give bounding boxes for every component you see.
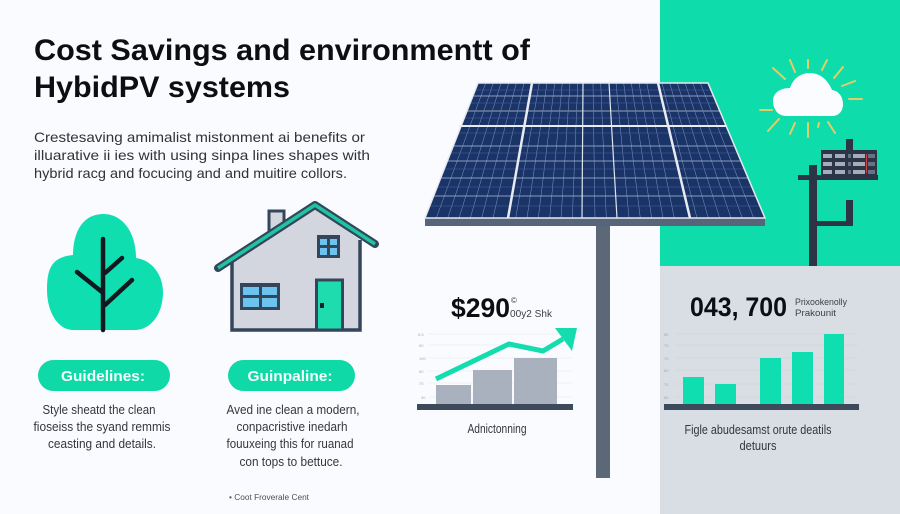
- pole: [596, 226, 610, 478]
- intro text block: illuarative ii ies with using sinpa lines shapes with: [34, 147, 370, 163]
- stat: $290: 00y2 Shk: [510, 309, 553, 320]
- title: [34, 34, 530, 104]
- chart: environmental bars: 70: [664, 382, 669, 387]
- intro text block: Crestesaving amimalist mistonment ai benefits or: [34, 129, 365, 145]
- stat: $290: ©: [511, 296, 517, 305]
- chart: cost savings bars and arrow: 60: [419, 369, 424, 374]
- caption: left column: Style sheatd the clean: [42, 402, 156, 417]
- chart: cost savings bars and arrow: 70: [419, 381, 424, 386]
- intro text block: hybrid racg and focucing and and muitire collors.: [34, 165, 347, 181]
- chart: environmental bars: 60: [664, 368, 669, 373]
- chart: cost savings bars and arrow: 50: [419, 343, 424, 348]
- stat: 043, 700: [690, 292, 847, 322]
- stat: 043, 700: Prakounit: [795, 308, 837, 318]
- icon: cloud: [773, 73, 843, 116]
- icon: large window: [240, 283, 280, 310]
- pill: Guinpaline: Guinpaline:: [248, 368, 332, 385]
- chart: cost savings bars and arrow: 100: [419, 356, 426, 361]
- chart caption: Figle abudesamst orute deatils: [684, 422, 832, 437]
- chart: environmental bars: 50: [664, 395, 669, 400]
- chart: cost savings bars and arrow: 5.5: [418, 332, 424, 337]
- pill: Guidelines: [38, 360, 170, 391]
- icon: battery post: [798, 139, 878, 266]
- icon: sun rays: [760, 60, 862, 137]
- panel: green sky background: [660, 0, 900, 266]
- chart caption: detuurs: [740, 438, 777, 453]
- caption: right column: con tops to bettuce.: [240, 454, 342, 469]
- solar panel: [420, 83, 770, 226]
- chart caption: Adnictonning: [468, 421, 526, 436]
- caption: left column: [34, 402, 171, 451]
- chart: cost savings bars and arrow: [417, 328, 577, 410]
- caption: right column: [226, 402, 360, 469]
- caption: left column: fioseiss the syand remmis: [34, 419, 171, 434]
- title: Cost Savings and environmentt of: [34, 34, 530, 67]
- pill: Guidelines: Guidelines:: [61, 368, 145, 385]
- stat: $290: $290: [451, 293, 510, 323]
- caption: right column: conpacristive inedarh: [236, 419, 348, 434]
- stat: 043, 700: 043, 700: [690, 292, 787, 322]
- icon: small window: [317, 235, 340, 258]
- caption: right column: Aved ine clean a modern,: [226, 402, 360, 417]
- chart: cost savings bars and arrow: 30: [421, 395, 426, 400]
- chart: environmental bars: [664, 332, 859, 410]
- stat: 043, 700: Prixookenolly: [795, 297, 847, 307]
- chart: environmental bars: 50: [664, 332, 669, 337]
- caption: left column: ceasting and details.: [48, 436, 156, 451]
- intro text block: [34, 129, 370, 181]
- title: HybidPV systems: [34, 71, 290, 104]
- chart: environmental bars: 70: [664, 343, 669, 348]
- caption: right column: fouuxeing this for ruanad: [226, 436, 354, 451]
- pill: Guinpaline: [228, 360, 355, 391]
- icon: tree: [47, 214, 163, 330]
- panel: grey chart background: [660, 266, 900, 514]
- footnote: • Coot Froverale Cent: [229, 493, 310, 502]
- icon: door: [316, 280, 342, 330]
- chart caption: [684, 422, 832, 453]
- icon: house: [218, 205, 375, 330]
- chart: environmental bars: 70: [664, 356, 669, 361]
- stat: $290: [451, 293, 553, 323]
